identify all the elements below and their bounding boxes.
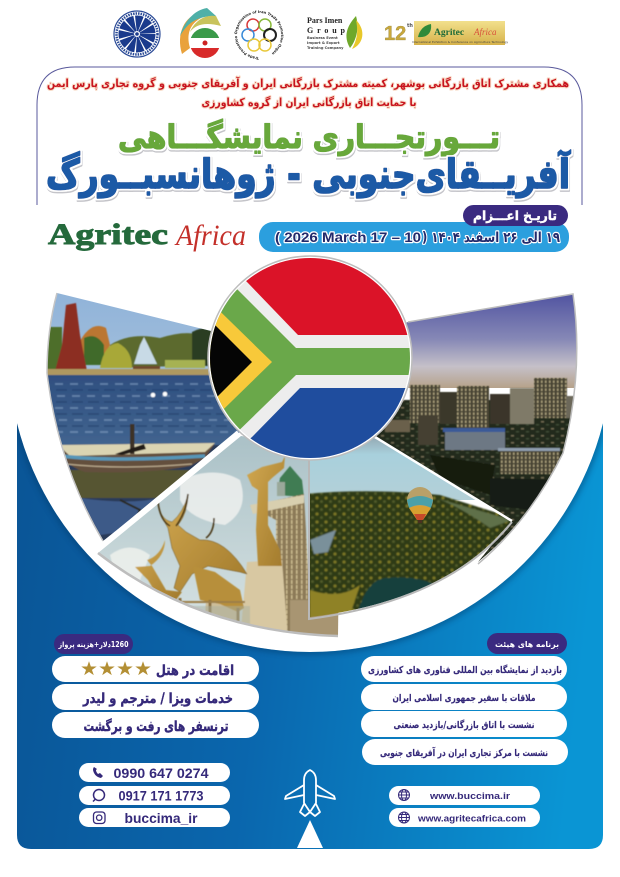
logo: Pars Imen Group: Pars Imen — [307, 16, 343, 25]
pill: transfer: ترنسفر های رفت و برگشت — [84, 718, 228, 735]
logo: 12th Agritec Africa: Agritec — [434, 28, 464, 38]
pill: trade centre — [362, 739, 568, 765]
pill: hotel: اقامت در هتل — [156, 663, 234, 679]
logo: Pars Imen Group: Group — [307, 26, 346, 35]
logo: Pars Imen Group: Business Event — [307, 36, 338, 40]
panel: services — [52, 656, 259, 738]
pill: phone: 0990 647 0274 — [114, 766, 209, 781]
pill: ambassador — [361, 684, 567, 710]
pill: instagram — [79, 808, 230, 827]
photo: balloon over forest — [310, 438, 510, 617]
organisers text — [47, 76, 569, 109]
pill: trade centre: نشست با مرکز تجاری ایران در آفریقای جنوبی — [380, 746, 548, 759]
pill: buccima: www.buccima.ir — [429, 791, 510, 802]
pill: whatsapp: 0917 171 1773 — [118, 788, 204, 804]
contact pills — [79, 763, 230, 827]
Agritec Africa wordmark: Agritec — [48, 218, 168, 251]
logo: Iran flag emblem — [180, 8, 222, 60]
pill: instagram: buccima_ir — [124, 811, 198, 826]
logo: Pars Imen Group: Training Company — [307, 46, 344, 50]
date english: ( 2026 March 17 – 10 — [275, 229, 421, 245]
pill: phone — [79, 763, 230, 782]
photo: golden antelopes — [98, 436, 338, 635]
photo rim: lake — [47, 293, 103, 541]
photo: Johannesburg skyline — [376, 295, 576, 562]
tag: programme — [487, 633, 567, 654]
title: tour: تـــورتجـــاری نمایشگـــاهی — [118, 118, 500, 156]
icon: globe — [398, 790, 410, 800]
logo: 12th Agritec Africa: Africa — [473, 27, 497, 37]
header logos — [113, 8, 508, 60]
organisers line 2: با حمایت اتاق بازرگانی ایران از گروه کشاورزی — [202, 96, 416, 109]
date persian: ۱۹ الی ۲۶ اسفند ۱۴۰۴ ( — [422, 230, 560, 246]
panel: programme list — [361, 656, 568, 765]
logo: Pars Imen Group: Import & Export — [307, 41, 340, 45]
logo: 12th Agritec Africa: th — [407, 23, 413, 29]
photo rim: skyline — [408, 294, 577, 564]
icon: phone — [93, 767, 103, 778]
icon: instagram — [94, 812, 105, 824]
icon: globe — [398, 812, 410, 823]
logo: Trade Promotion Organization: Trade Promotion Organization of Iran Trade Promotion Organ — [234, 10, 284, 60]
tag: price — [54, 634, 133, 654]
photo rim: balloon — [309, 450, 512, 619]
logo: Pars Imen Group — [307, 16, 362, 50]
pill: transfer — [52, 712, 259, 738]
icon: airplane — [285, 770, 335, 848]
icon: four stars: ★★★★ — [80, 658, 152, 680]
blue lower panel with circular cut-out — [17, 395, 603, 849]
logo: 12th Agritec Africa — [384, 21, 508, 45]
logo: Bushehr chamber of commerce — [114, 11, 160, 57]
pill: buccima — [389, 786, 540, 805]
tag: programme: برنامه های هیئت — [495, 640, 559, 649]
pill: agritec — [389, 808, 540, 827]
date tag — [463, 205, 568, 226]
flag of South Africa — [207, 255, 412, 461]
Agritec Africa wordmark — [48, 218, 246, 252]
pill: visa — [52, 684, 259, 710]
icon: whatsapp — [93, 790, 104, 802]
Agritec Africa wordmark: Africa — [174, 219, 246, 252]
pill: agritec: www.agritecafrica.com — [417, 814, 526, 824]
pill: visa: خدمات ویزا / مترجم و لیدر — [82, 691, 233, 707]
pill: exhibition: بازدید از نمایشگاه بین المللی فناوری های کشاورزی — [368, 664, 562, 676]
photo rim: antelopes — [98, 553, 338, 636]
logo: 12th Agritec Africa: 12 — [384, 23, 406, 45]
website pills — [389, 786, 540, 827]
pill: ambassador: ملاقات با سفیر جمهوری اسلامی ایران — [392, 693, 536, 704]
header rounded outline — [37, 67, 582, 205]
white gap lines between photos — [98, 432, 238, 548]
pill: hotel — [52, 656, 259, 682]
date tag: تاریـخ اعـــزام — [473, 208, 557, 224]
pill: chamber: نشست با اتاق بازرگانی/بازدید صنعتی — [394, 719, 534, 731]
pill: chamber — [361, 711, 567, 737]
date bar — [259, 222, 569, 252]
icon: hot air balloon — [407, 487, 433, 523]
pill: exhibition — [361, 656, 567, 682]
photo: lake with boat — [48, 293, 240, 541]
logo: 12th Agritec Africa: International Exhibition & Conference on Agriculture Technology — [412, 40, 508, 44]
pill: whatsapp — [79, 786, 230, 805]
plane exhaust — [297, 820, 323, 848]
tag: price: 1260دلار+هزینه پرواز — [58, 640, 128, 649]
